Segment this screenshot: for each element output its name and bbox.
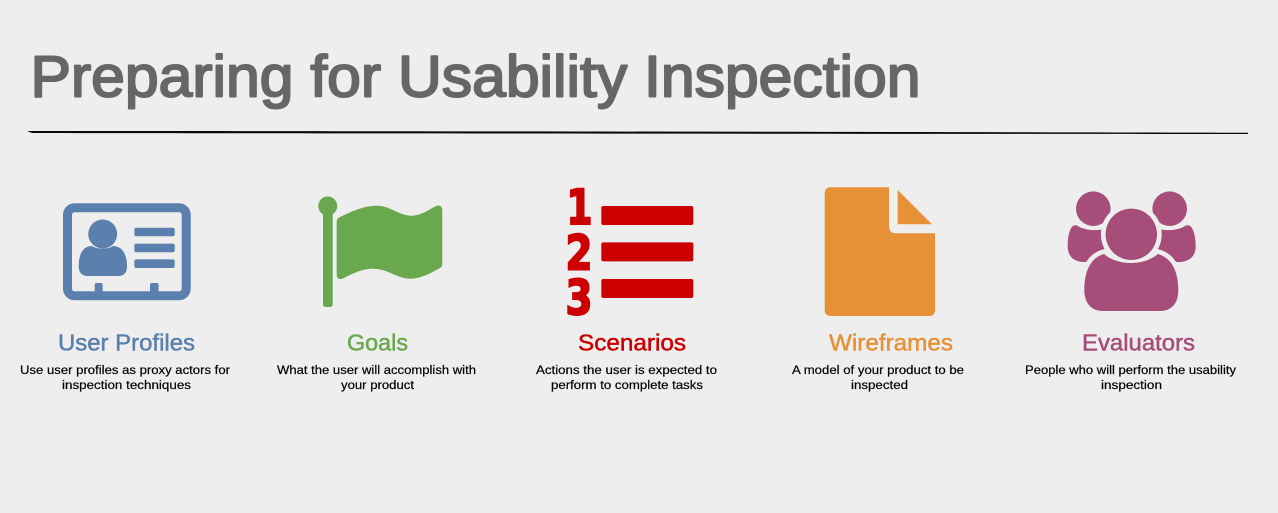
description: scenarios xyxy=(536,363,717,392)
description: scenarios: Actions the user is expected to xyxy=(536,363,717,377)
title: Preparing for Usability Inspection xyxy=(30,44,920,109)
icon: flag xyxy=(318,196,442,307)
description: wireframes xyxy=(792,363,964,392)
icon: group of people xyxy=(1068,191,1196,311)
panel: scenarios xyxy=(536,180,717,392)
icon: numbered list: 1 xyxy=(566,180,592,236)
panel: evaluators xyxy=(1025,191,1237,392)
panel: goals xyxy=(277,196,476,392)
heading: user profiles: User Profiles xyxy=(58,330,195,356)
description: evaluators: inspection xyxy=(1101,378,1162,392)
heading: wireframes: Wireframes xyxy=(829,330,953,356)
description: wireframes: inspected xyxy=(851,378,908,392)
icon: numbered list: 3 xyxy=(566,270,592,326)
panel: wireframes xyxy=(792,187,964,392)
description: goals xyxy=(277,363,476,392)
description: user profiles: Use user profiles as proxy actors for xyxy=(20,363,230,377)
description: user profiles: inspection techniques xyxy=(62,378,191,392)
heading: evaluators: Evaluators xyxy=(1082,330,1195,356)
icon: numbered list: 2 xyxy=(566,226,592,282)
description: goals: your product xyxy=(341,378,415,392)
icon: id card xyxy=(68,208,186,296)
description: evaluators xyxy=(1025,363,1237,392)
icon: document xyxy=(825,187,935,316)
description: user profiles xyxy=(20,363,230,392)
heading: goals: Goals xyxy=(347,330,408,356)
title underline xyxy=(27,131,1248,134)
panel: user profiles xyxy=(20,208,230,392)
heading: scenarios: Scenarios xyxy=(578,330,686,356)
icon: numbered list xyxy=(566,180,693,326)
description: goals: What the user will accomplish with xyxy=(277,363,476,377)
description: scenarios: perform to complete tasks xyxy=(551,378,703,392)
description: wireframes: A model of your product to be xyxy=(792,363,964,377)
description: evaluators: People who will perform the usability xyxy=(1025,363,1237,377)
